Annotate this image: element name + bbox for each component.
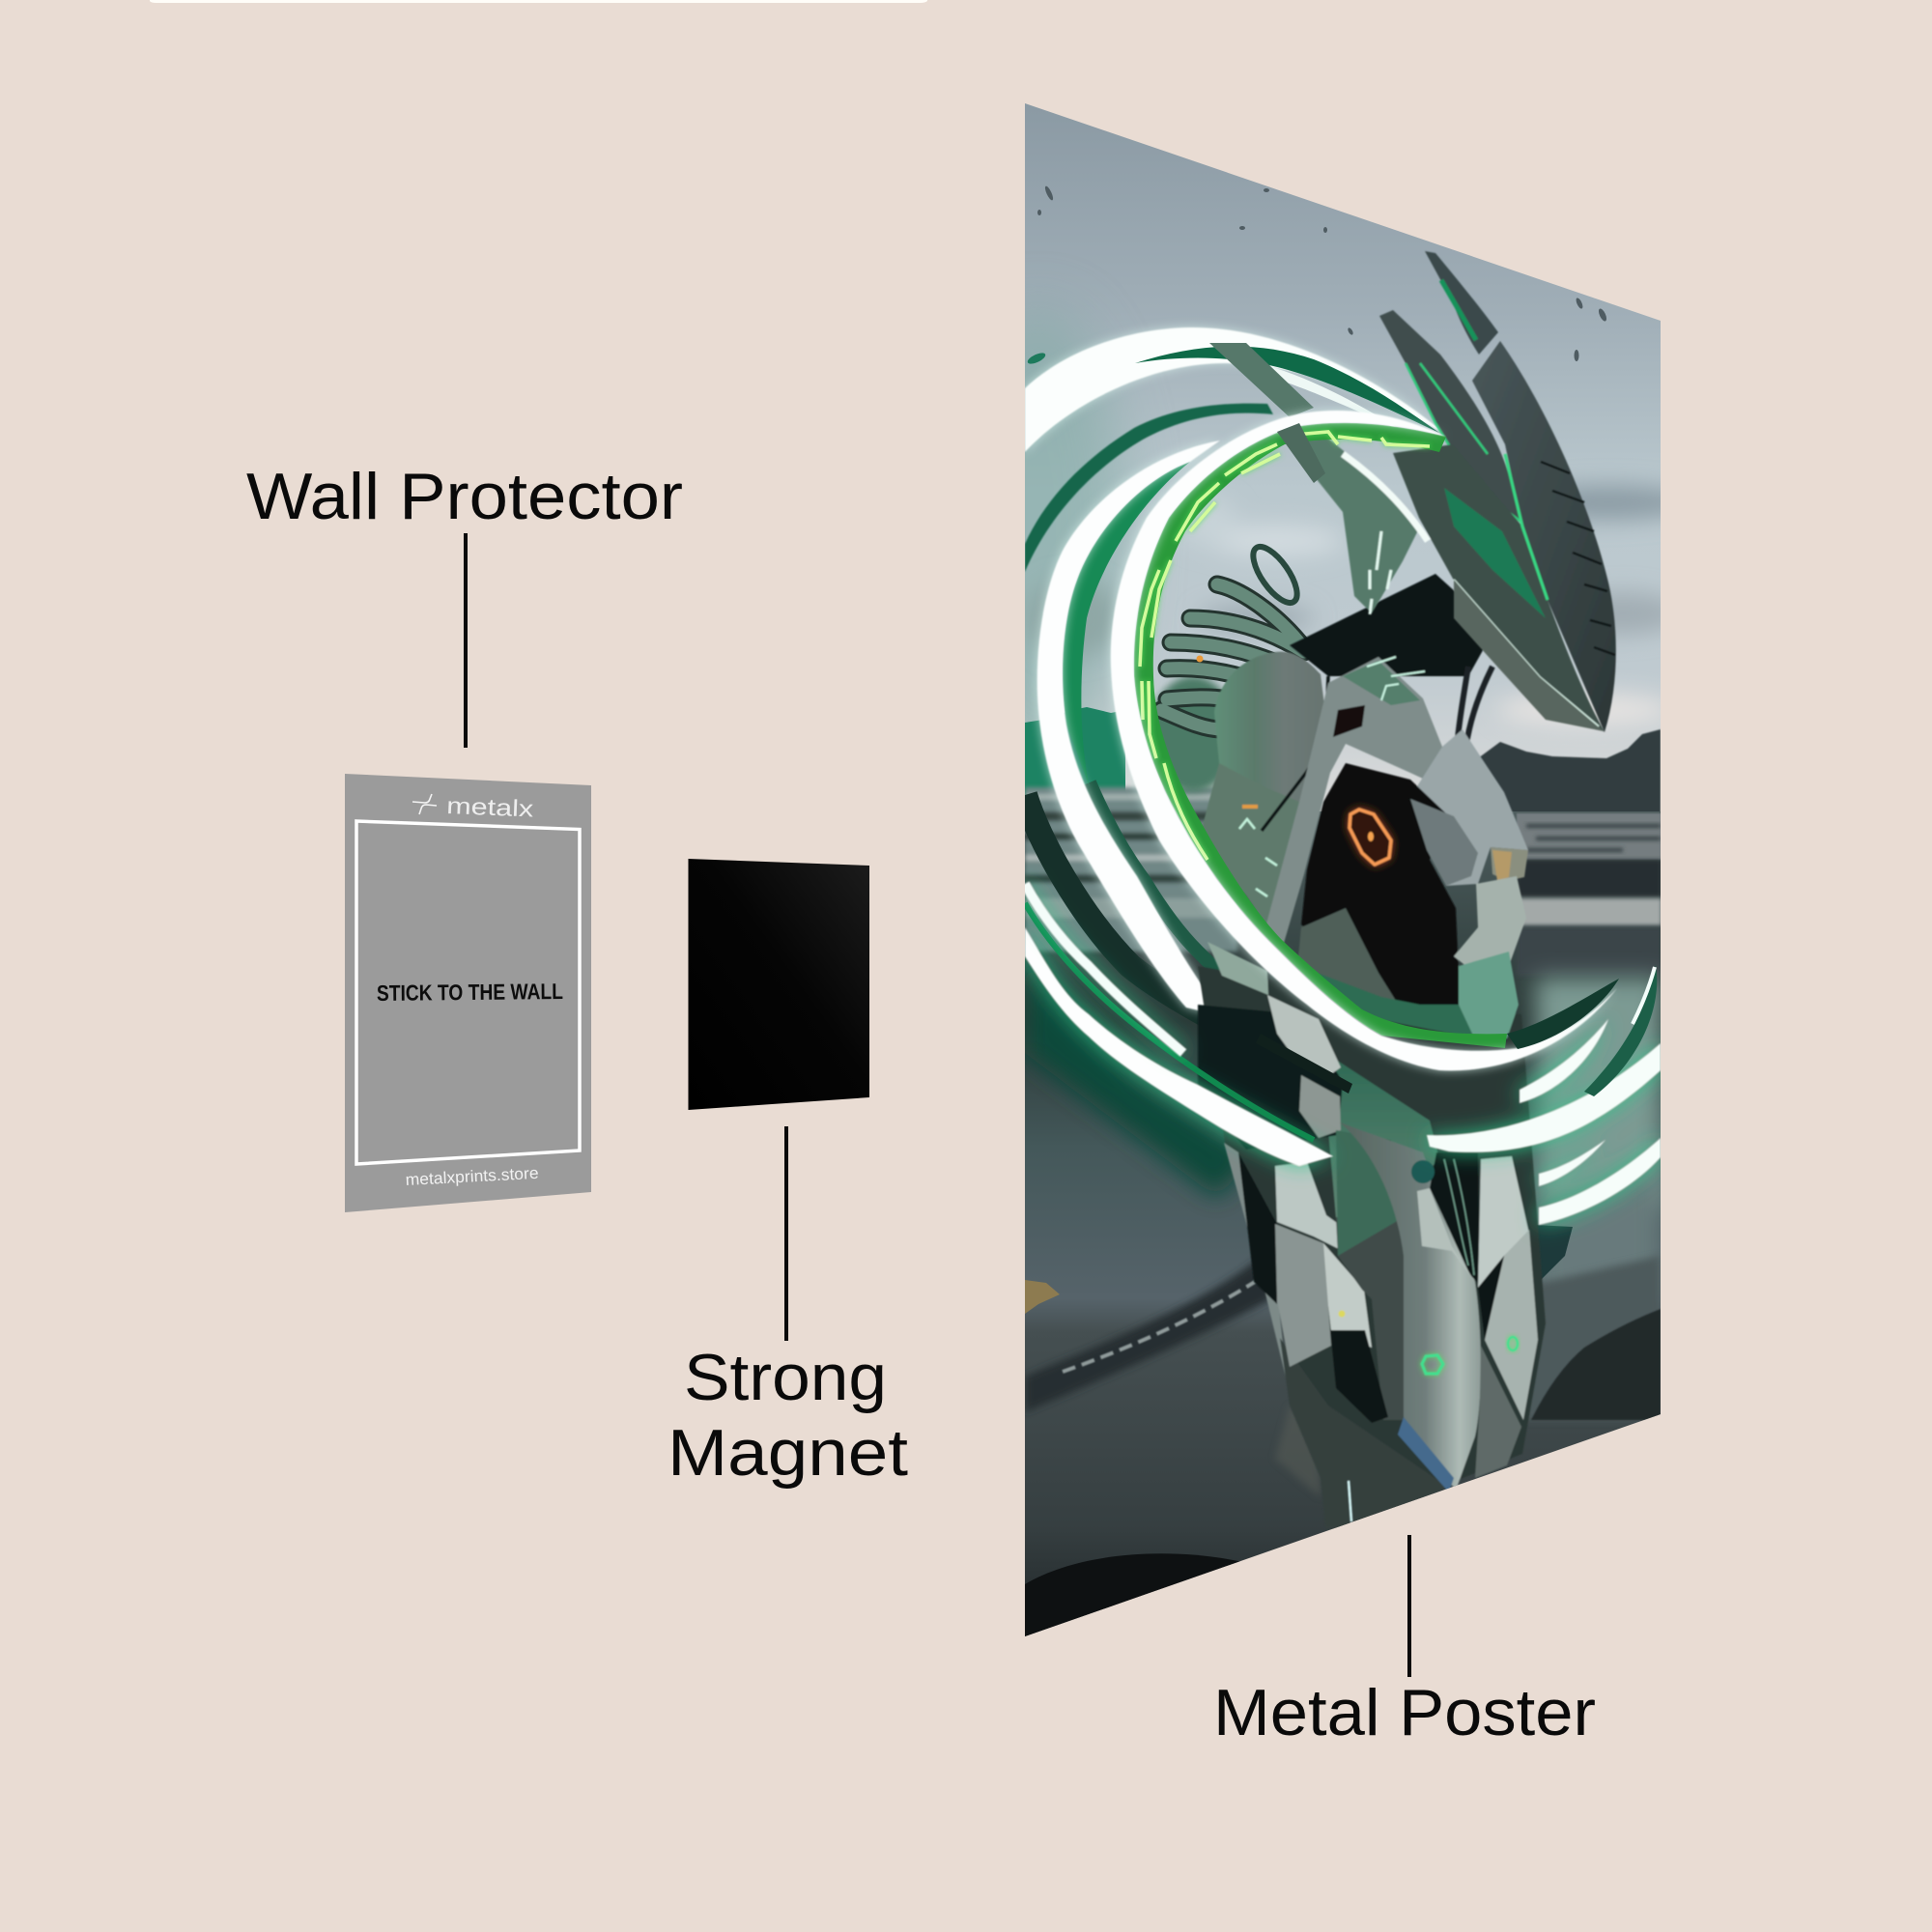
panel: robot figure	[1198, 574, 1546, 1528]
shoulder amber light	[1242, 805, 1258, 809]
amber light	[1196, 655, 1204, 663]
forearm plate	[1275, 1224, 1365, 1367]
white ring C	[1111, 411, 1617, 1070]
collar plate	[1265, 657, 1488, 950]
neck chest glow	[1459, 952, 1519, 1038]
ring D green stripe	[1025, 903, 1314, 1140]
lower gray chest plate	[1297, 908, 1410, 1024]
heading: Metal Poster: Metal Poster	[1213, 1676, 1596, 1749]
green lower chest	[1299, 966, 1478, 1038]
pauldron	[1267, 995, 1341, 1074]
yellow indicator	[1339, 1310, 1345, 1318]
feather oval	[1245, 540, 1305, 610]
arrow: wall protector leader line	[464, 533, 468, 748]
main hip fairing	[1340, 1122, 1481, 1491]
left teal hill	[1025, 707, 1125, 795]
logo mark	[412, 794, 437, 814]
black chest cavity	[1301, 763, 1468, 1005]
pale flats	[1517, 813, 1662, 860]
back feathers	[1150, 540, 1305, 792]
green chevrons on shoulder	[1239, 819, 1277, 896]
glowing body icon right	[1508, 1337, 1518, 1350]
neck black mass	[1290, 574, 1495, 676]
dark arm band over ring	[1256, 1034, 1352, 1094]
flat dark strips	[1526, 826, 1661, 850]
water reflection	[1517, 898, 1662, 925]
thin white light	[1349, 1481, 1351, 1521]
upper strut	[1285, 430, 1420, 613]
mountains	[1478, 729, 1661, 816]
crest one green edge	[1441, 280, 1476, 340]
central dark slot	[1430, 1152, 1480, 1285]
arc two	[1520, 1019, 1608, 1103]
arrow: metal poster leader line	[1407, 1535, 1411, 1677]
helmet lower edge line	[1454, 580, 1599, 726]
main helmet blade	[1472, 341, 1616, 732]
shoulder lower armor	[1198, 763, 1323, 950]
mechanical bits	[1299, 1075, 1341, 1138]
protector instruction: STICK TO THE WALL	[377, 979, 563, 1006]
black wedge	[1478, 1256, 1504, 1340]
top white strip	[150, 0, 927, 3]
jaw	[1454, 876, 1526, 976]
heading: Strong Magnet	[668, 1341, 908, 1490]
gravel by foot	[1277, 1411, 1320, 1492]
chest green mass	[1328, 1060, 1439, 1217]
foam flecks	[1063, 1275, 1265, 1372]
lower leg	[1280, 1338, 1449, 1528]
blue accent	[1398, 1417, 1454, 1492]
right lower panel	[1485, 1230, 1538, 1420]
dark shore strip	[1517, 860, 1662, 896]
wet sand	[1517, 927, 1662, 976]
helmet body	[1393, 444, 1605, 732]
ring D thin white	[1025, 884, 1183, 1053]
robotic hand	[1330, 1330, 1388, 1423]
chest orb	[1411, 1160, 1435, 1183]
lower left ring D	[1025, 927, 1333, 1166]
band water between rings	[1025, 787, 1237, 952]
crest one	[1425, 251, 1498, 355]
feather plates	[1161, 584, 1304, 729]
sky teal tint	[1025, 313, 1146, 723]
dark recess	[1336, 1217, 1404, 1420]
face slot	[1491, 847, 1528, 881]
torso back mass	[1198, 966, 1546, 1524]
arc four	[1539, 1138, 1661, 1225]
right tidal flats	[1517, 813, 1662, 1420]
arrow: magnet leader line	[784, 1126, 788, 1341]
feather green mass	[1150, 676, 1236, 792]
upper forearm light	[1275, 1162, 1396, 1294]
ring base band	[1134, 423, 1507, 1048]
chest lower panel	[1417, 1188, 1475, 1282]
face plate	[1410, 799, 1478, 886]
label line two: Magnet	[668, 1416, 908, 1490]
shoulder dome	[1214, 652, 1329, 802]
crest two green edge	[1406, 363, 1522, 523]
upper dark hip	[1198, 1005, 1343, 1150]
panel: wall protector	[345, 774, 591, 1212]
crest two	[1379, 310, 1522, 523]
lit sand	[1542, 1171, 1661, 1283]
helmet	[1285, 251, 1616, 732]
under helmet shell	[1454, 580, 1604, 731]
glowing body icon left	[1422, 1355, 1443, 1374]
green lit helmet panel	[1444, 488, 1546, 618]
panel: strong magnet	[688, 859, 869, 1110]
core dot	[1368, 832, 1374, 841]
fin over ring	[1277, 423, 1325, 483]
strut lights	[1370, 531, 1391, 614]
debris in sky	[1026, 185, 1608, 366]
hand casing	[1323, 1243, 1372, 1348]
label line one: Strong	[684, 1341, 887, 1414]
bottom black mound	[1025, 1553, 1240, 1636]
green circuit ring	[1134, 423, 1507, 1048]
arc three	[1539, 1140, 1605, 1186]
arc one	[1427, 1043, 1661, 1152]
clouds	[1028, 475, 1661, 730]
white streak on green arc	[1265, 365, 1406, 433]
right crescent arcs	[1427, 1019, 1661, 1225]
shoulder seam	[1262, 676, 1328, 831]
fin blade	[1209, 343, 1314, 417]
shoreline rocks	[1025, 1251, 1271, 1412]
thin dark green band	[1090, 782, 1265, 1014]
dark lower band	[1025, 795, 1346, 1079]
helmet green seam	[1505, 454, 1548, 600]
white frame	[356, 821, 580, 1164]
bottom right leg piece	[1475, 1346, 1521, 1478]
hanging cables	[1457, 667, 1492, 749]
protector sheet	[345, 774, 591, 1212]
logo wordmark: metalx	[446, 793, 534, 822]
heading: Wall Protector: Wall Protector	[246, 460, 683, 533]
greenish sand	[1536, 978, 1662, 1209]
green arc over white	[1135, 347, 1439, 433]
small cavity window	[1333, 705, 1365, 737]
sky	[1025, 97, 1662, 811]
white ring B	[1037, 440, 1227, 1017]
outer white arc	[1025, 327, 1446, 452]
slot green lines	[1444, 1159, 1474, 1275]
left dark side	[1238, 1152, 1277, 1304]
machine teal	[1538, 1225, 1573, 1279]
light hip strut	[1208, 942, 1268, 995]
dark green under ring glow	[1025, 956, 1256, 1198]
textured green crescent	[1063, 462, 1190, 787]
ring circuit pattern	[1140, 432, 1430, 860]
strut white glow line	[1343, 454, 1428, 541]
store url: metalxprints.store	[405, 1164, 539, 1189]
left side strut	[1224, 1143, 1287, 1381]
helmet vents	[1541, 462, 1615, 655]
panel: metal poster artwork	[1025, 103, 1661, 1636]
green recess tint	[1336, 1130, 1404, 1256]
upper collar green tint	[1343, 661, 1420, 705]
face skin	[1492, 850, 1512, 881]
claw white tip	[1633, 967, 1655, 1024]
collar light traces	[1367, 657, 1425, 700]
ground	[1025, 811, 1662, 1652]
orange hexagon core	[1350, 810, 1391, 865]
lower right sand	[1521, 1256, 1661, 1420]
feather shadows	[1161, 584, 1304, 729]
dark green back arc	[1025, 404, 1273, 572]
bottom right dark mound	[1531, 1309, 1661, 1420]
right upper panel	[1478, 1156, 1529, 1288]
golden rock	[1025, 1280, 1060, 1314]
dark green claw	[1584, 965, 1657, 1096]
ring C tip dark	[1507, 979, 1619, 1049]
head armor	[1410, 729, 1528, 886]
